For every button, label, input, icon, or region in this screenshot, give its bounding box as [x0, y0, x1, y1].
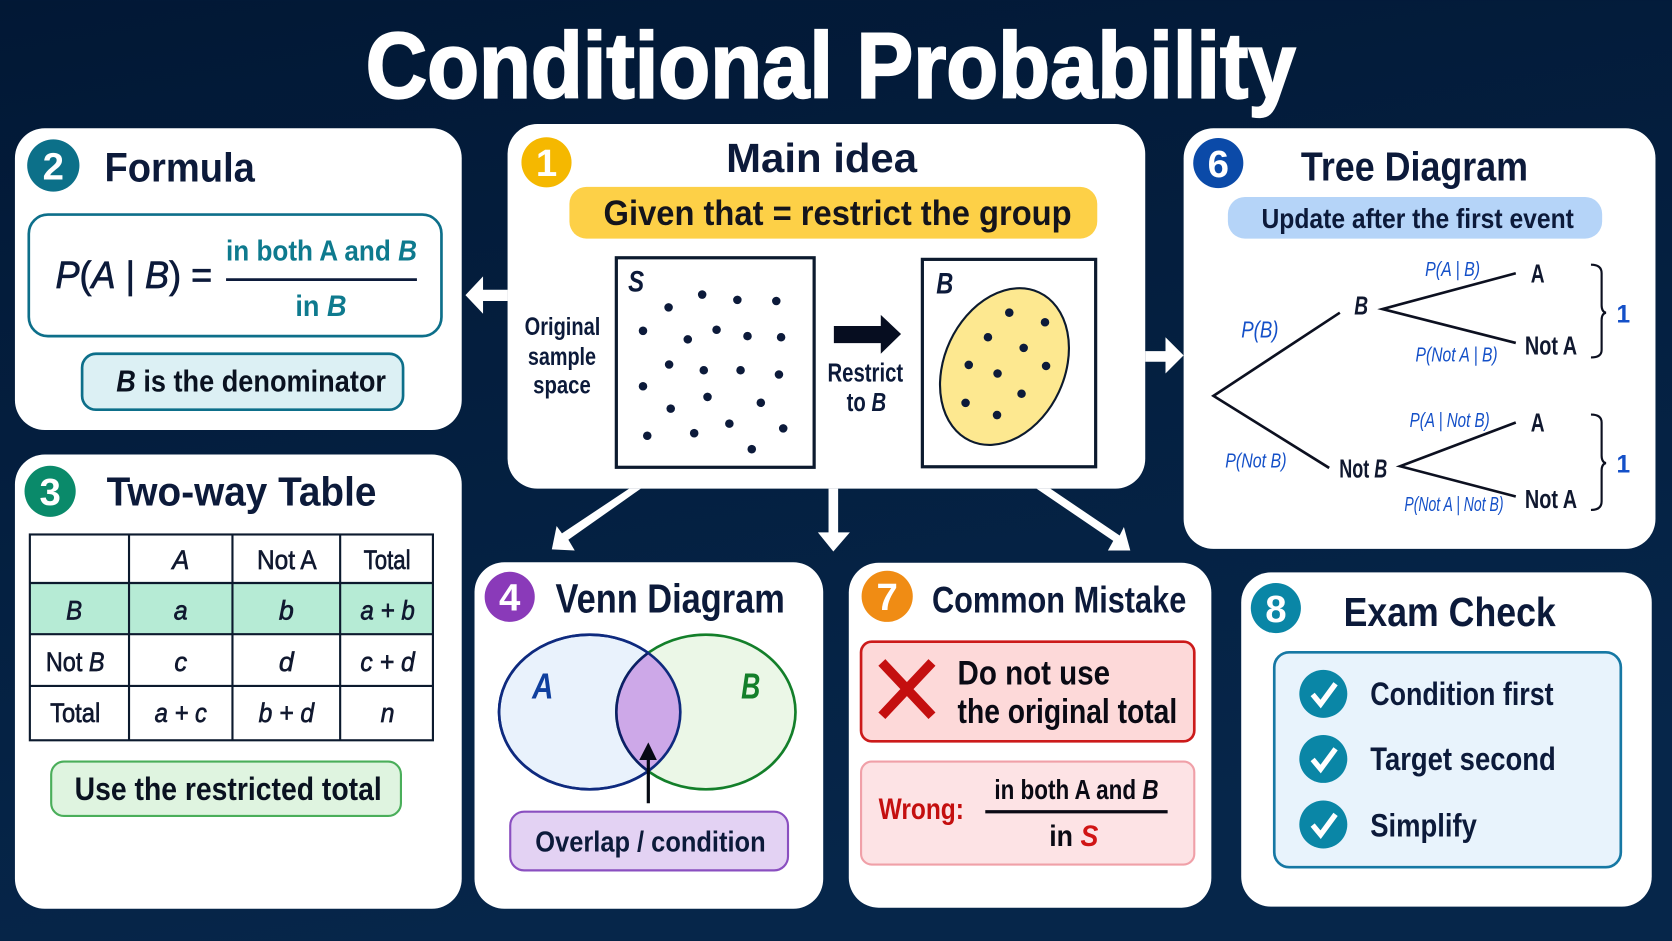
badge 4: 4	[499, 577, 521, 620]
two-way table: Not B	[46, 647, 104, 677]
callout: denominator	[82, 354, 403, 410]
heading: formula: Formula	[105, 145, 255, 191]
tree probability labels: P(Not B)	[1225, 450, 1287, 472]
panel: formula	[15, 128, 462, 430]
check item: condition first: Condition first	[1370, 676, 1554, 712]
formula box: P(A | B) =	[55, 254, 212, 297]
panel: venn diagram	[475, 562, 823, 909]
badge 4	[485, 572, 535, 622]
arrow: main idea to formula	[465, 276, 508, 314]
tree probability labels: P(A | Not B)	[1410, 410, 1490, 432]
sample space box S	[616, 258, 814, 467]
arrow: main idea to tree diagram	[1145, 337, 1184, 373]
panel: exam check	[1241, 572, 1652, 907]
callout: restricted total	[51, 762, 401, 816]
callout: update: Update after the first event	[1261, 203, 1574, 234]
heading: main idea: Main idea	[726, 135, 918, 181]
tree node labels: Not B	[1339, 455, 1387, 483]
venn diagram	[499, 635, 795, 789]
wrong formula box: in both A and B	[994, 774, 1159, 805]
two-way table: Not A	[257, 545, 317, 575]
heading: venn diagram: Venn Diagram	[556, 575, 785, 621]
two-way table: a + c	[155, 698, 207, 728]
sample space box S: S	[628, 265, 644, 298]
two-way table: d	[279, 647, 295, 677]
heading: tree diagram: Tree Diagram	[1301, 143, 1528, 189]
restricted box B	[916, 259, 1096, 467]
arrow: main idea to common mistake	[818, 489, 850, 552]
heading: common mistake: Common Mistake	[932, 578, 1186, 620]
two-way table: a	[174, 595, 188, 625]
check item: target second	[1299, 735, 1556, 783]
label: restrict to B: to B	[847, 389, 886, 417]
two-way table: B	[66, 595, 82, 625]
tree probability labels: P(B)	[1241, 317, 1279, 343]
callout: denominator: B is the denominator	[116, 364, 386, 399]
arrow: main idea to venn diagram	[552, 489, 641, 550]
tree node labels: A	[1531, 260, 1545, 288]
heading: exam check: Exam Check	[1344, 589, 1556, 635]
callout: restricted total: Use the restricted total	[75, 771, 382, 807]
badge 1: 1	[536, 142, 557, 185]
label: restrict to B	[827, 359, 904, 417]
tree node labels: B	[1354, 292, 1368, 320]
arrow: to overlap	[639, 742, 657, 803]
panel: common mistake	[849, 563, 1211, 908]
callout: overlap: Overlap / condition	[535, 827, 766, 859]
two-way table: a + b	[360, 595, 415, 625]
badge 2: 2	[43, 145, 64, 188]
panel: tree diagram	[1184, 128, 1655, 549]
tree probability labels: P(A | B)	[1425, 259, 1480, 281]
braces summing to 1: 1	[1617, 301, 1630, 328]
two-way table: n	[381, 698, 395, 728]
callout: given that	[569, 187, 1097, 239]
label: original sample space: sample	[528, 344, 596, 371]
venn diagram: A	[531, 666, 553, 707]
two-way table: c	[174, 647, 188, 677]
badge 6: 6	[1208, 143, 1229, 186]
callout: overlap	[510, 812, 788, 870]
checklist box	[1274, 652, 1621, 867]
label: original sample space: Original	[525, 314, 600, 341]
check item: target second: Target second	[1370, 741, 1556, 777]
badge 7: 7	[877, 576, 898, 619]
two-way table: Total	[364, 545, 411, 575]
warning box	[861, 642, 1194, 741]
two-way table	[30, 534, 433, 740]
check item: simplify	[1299, 801, 1477, 849]
formula box	[29, 215, 441, 336]
panel: main idea	[508, 124, 1145, 489]
tree probability labels: P(Not A | B)	[1416, 345, 1498, 367]
badge 6	[1193, 138, 1243, 188]
wrong formula box	[861, 762, 1194, 865]
badge 3	[25, 466, 76, 517]
arrow: main idea to exam check	[1036, 489, 1130, 550]
label: original sample space	[525, 314, 600, 400]
label: original sample space: space	[533, 373, 591, 400]
badge 7	[862, 571, 913, 622]
badge 8	[1251, 583, 1301, 633]
tree probability labels: P(Not A | Not B)	[1404, 494, 1504, 516]
two-way table: c + d	[360, 647, 416, 677]
formula box: in both A and B	[226, 235, 417, 267]
callout: given that: Given that = restrict the group	[604, 194, 1072, 233]
braces summing to 1: 1	[1617, 452, 1630, 479]
heading: two-way table: Two-way Table	[107, 469, 376, 515]
check item: condition first	[1299, 670, 1554, 718]
two-way table: A	[170, 545, 189, 575]
arrow: restrict	[834, 315, 901, 354]
tree branches	[1213, 273, 1516, 497]
two-way table: b + d	[259, 698, 315, 728]
wrong formula box: Wrong:	[879, 793, 964, 826]
two-way table: b	[279, 595, 294, 625]
two-way table: Total	[50, 698, 100, 728]
label: restrict to B: Restrict	[827, 359, 904, 387]
badge 3: 3	[39, 471, 61, 514]
warning box: the original total	[958, 693, 1177, 731]
wrong formula box: in S	[1049, 820, 1098, 853]
braces summing to 1	[1591, 265, 1630, 510]
warning box: Do not use	[958, 654, 1110, 692]
callout: update	[1228, 197, 1602, 239]
restricted box B: B	[936, 267, 953, 300]
tree node labels: A	[1531, 410, 1545, 438]
formula box: in B	[295, 290, 347, 323]
title: Conditional Probability	[366, 13, 1296, 117]
tree probability labels	[1225, 259, 1504, 516]
badge 2	[27, 139, 79, 192]
venn diagram: B	[741, 666, 760, 707]
check item: simplify: Simplify	[1370, 807, 1477, 843]
badge 1	[521, 137, 572, 187]
tree node labels	[1339, 260, 1577, 514]
tree node labels: Not A	[1525, 486, 1577, 514]
badge 8: 8	[1265, 588, 1287, 631]
panel: two-way table	[15, 455, 462, 909]
tree node labels: Not A	[1525, 332, 1577, 360]
